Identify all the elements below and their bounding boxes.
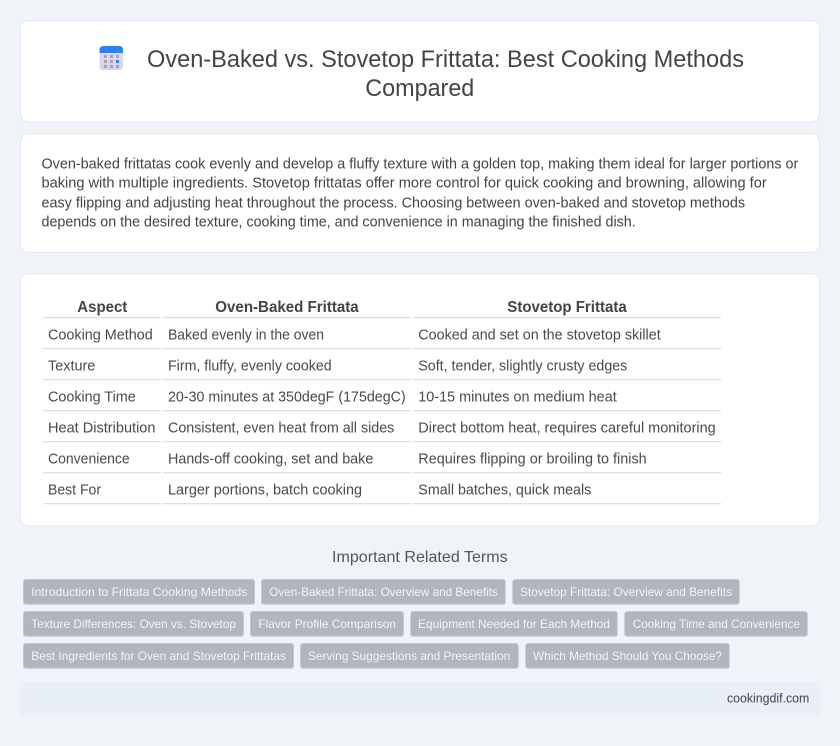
tag (24, 644, 294, 668)
panel: intro paragraph (20, 134, 820, 252)
tag: Flavor Profile Comparison (258, 617, 396, 631)
table row: cooking time: 20-30 minutes at 350degF (175degC) (168, 389, 406, 405)
table row: best for: Larger portions, batch cooking (168, 482, 362, 498)
table row: best for: Best For (48, 482, 101, 498)
tag (24, 612, 244, 636)
table row: heat distribution: Direct bottom heat, requires careful monitoring (418, 420, 716, 436)
tag (300, 644, 518, 668)
table row: best for (48, 482, 591, 498)
tag (625, 612, 807, 636)
text block: intro: depends on the desired texture, cooking time, and convenience in managing the finished dish. (42, 214, 636, 230)
tag (411, 612, 617, 636)
tag group: related terms (24, 580, 807, 668)
text block: intro: Oven-baked frittatas cook evenly and develop a fluffy texture with a golden top, making them ideal for larger portions or (42, 156, 799, 172)
panel: comparison table (20, 274, 820, 526)
tag: Oven-Baked Frittata: Overview and Benefits (269, 585, 498, 599)
table row: convenience: Convenience (48, 451, 130, 467)
table row: texture (48, 358, 627, 374)
tag: Texture Differences: Oven vs. Stovetop (31, 617, 236, 631)
icon: calendar (100, 46, 123, 70)
table row: convenience (48, 451, 647, 467)
text block: intro: baking with multiple ingredients. Stovetop frittatas offer more control for quick cooking and browning, allowing for (42, 176, 767, 192)
tag (24, 580, 254, 604)
table header (77, 299, 627, 316)
text block: intro: easy flipping and adjusting heat throughout the process. Choosing between oven-baked and stovetop methods (42, 195, 745, 211)
table header: Stovetop Frittata (507, 299, 627, 316)
tag: Equipment Needed for Each Method (418, 617, 610, 631)
title: Compared (365, 75, 474, 102)
tag (250, 612, 404, 636)
table row: cooking method (48, 327, 661, 343)
tag (513, 580, 739, 604)
tag: Introduction to Frittata Cooking Methods (31, 585, 247, 599)
tag: Stovetop Frittata: Overview and Benefits (520, 585, 732, 599)
table row: cooking method: Baked evenly in the oven (168, 327, 324, 343)
table row: best for: Small batches, quick meals (418, 482, 591, 498)
tag (526, 644, 729, 668)
tag: Best Ingredients for Oven and Stovetop Frittatas (31, 649, 286, 663)
table row: heat distribution (48, 420, 716, 436)
table row: cooking method: Cooked and set on the stovetop skillet (418, 327, 661, 343)
table row: cooking time: Cooking Time (48, 389, 136, 405)
table row: convenience: Requires flipping or broiling to finish (418, 451, 647, 467)
table header: Aspect (77, 299, 127, 316)
text block: intro (42, 156, 799, 230)
table row: heat distribution: Heat Distribution (48, 420, 156, 436)
title (147, 46, 744, 102)
table row: heat distribution: Consistent, even heat from all sides (168, 420, 394, 436)
table row: cooking method: Cooking Method (48, 327, 153, 343)
tag: Serving Suggestions and Presentation (308, 649, 510, 663)
footer (20, 682, 820, 716)
heading: related terms: Important Related Terms (332, 549, 508, 566)
footer source text: cookingdif.com (727, 691, 809, 706)
panel: title card (20, 20, 820, 122)
tag: Cooking Time and Convenience (633, 617, 800, 631)
table header: Oven-Baked Frittata (215, 299, 359, 316)
table row: convenience: Hands-off cooking, set and bake (168, 451, 373, 467)
table row: texture: Firm, fluffy, evenly cooked (168, 358, 332, 374)
tag: Which Method Should You Choose? (533, 649, 722, 663)
table row: texture: Soft, tender, slightly crusty edges (418, 358, 627, 374)
table row: cooking time (48, 389, 617, 405)
table row: cooking time: 10-15 minutes on medium heat (418, 389, 617, 405)
table row: texture: Texture (48, 358, 95, 374)
tag (262, 580, 505, 604)
title: Oven-Baked vs. Stovetop Frittata: Best Cooking Methods (147, 46, 744, 73)
